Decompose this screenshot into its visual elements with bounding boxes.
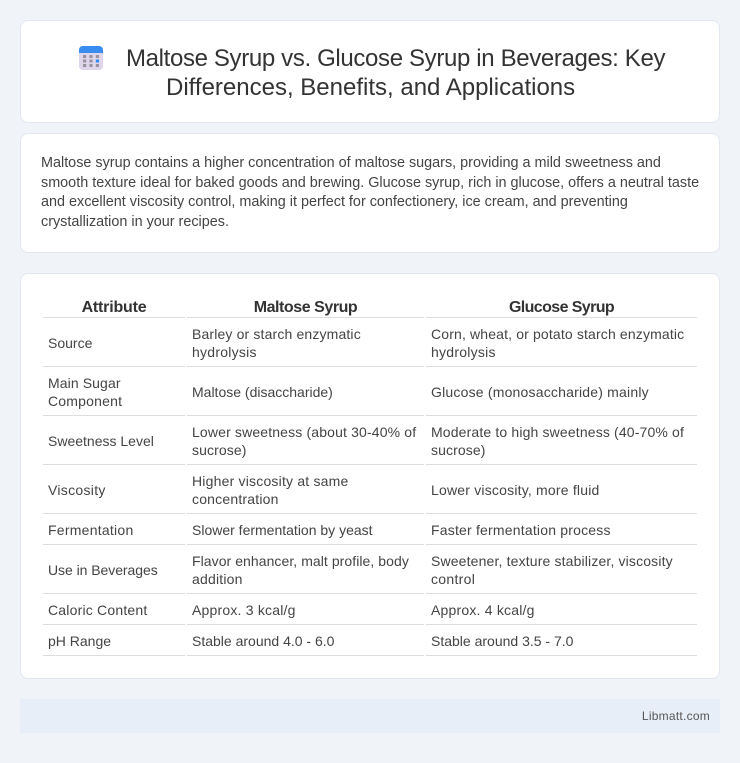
row: use in beverages: control [431, 571, 475, 587]
row: use in beverages [48, 553, 673, 587]
row: sweetness level: Moderate to high sweetness (40-70% of [431, 424, 684, 440]
row: main sugar component: Glucose (monosaccharide) mainly [431, 384, 649, 400]
row: caloric content: Caloric Content [48, 602, 148, 618]
row: caloric content [48, 602, 535, 618]
footer [20, 699, 720, 733]
column headers: Glucose Syrup [509, 298, 614, 316]
title: Maltose Syrup vs. Glucose Syrup in Beverages: Key [126, 45, 665, 72]
intro paragraph: Maltose syrup contains a higher concentration of maltose sugars, providing a mild sweetness and [41, 155, 661, 171]
row: pH range: Stable around 3.5 - 7.0 [431, 633, 573, 649]
row: fermentation [48, 522, 611, 538]
row: source: hydrolysis [431, 344, 496, 360]
row: pH range: Stable around 4.0 - 6.0 [192, 633, 334, 649]
row: fermentation: Faster fermentation process [431, 522, 611, 538]
row: main sugar component: Main Sugar [48, 375, 121, 391]
intro paragraph: and excellent viscosity control, making it perfect for confectionery, ice cream, and preventing [41, 194, 628, 210]
row: fermentation: Slower fermentation by yeast [192, 522, 373, 538]
row: main sugar component [48, 375, 649, 409]
row: source: hydrolysis [192, 344, 257, 360]
row: sweetness level: sucrose) [431, 442, 485, 458]
title: Differences, Benefits, and Applications [166, 74, 575, 101]
row: sweetness level: sucrose) [192, 442, 246, 458]
row: viscosity: Lower viscosity, more fluid [431, 482, 600, 498]
row: sweetness level: Sweetness Level [48, 433, 154, 449]
row: viscosity: concentration [192, 491, 279, 507]
row: viscosity [48, 473, 600, 507]
row: sweetness level [48, 424, 684, 458]
row: viscosity: Viscosity [48, 482, 106, 498]
panel: intro text [20, 133, 720, 253]
intro paragraph [41, 155, 699, 230]
row: use in beverages: addition [192, 571, 243, 587]
row: viscosity: Higher viscosity at same [192, 473, 349, 489]
row: caloric content: Approx. 3 kcal/g [192, 602, 296, 618]
row: main sugar component: Component [48, 393, 122, 409]
row: fermentation: Fermentation [48, 522, 133, 538]
header panel [20, 20, 720, 123]
row: use in beverages: Flavor enhancer, malt profile, body [192, 553, 409, 569]
row: pH range [48, 633, 573, 649]
column headers: Maltose Syrup [254, 298, 357, 316]
column headers: Attribute [82, 298, 146, 316]
row: pH range: pH Range [48, 633, 111, 649]
title [126, 45, 666, 101]
row: source: Corn, wheat, or potato starch enzymatic [431, 326, 684, 342]
row: source [48, 326, 684, 360]
row: use in beverages: Use in Beverages [48, 562, 158, 578]
row: caloric content: Approx. 4 kcal/g [431, 602, 535, 618]
intro paragraph: crystallization in your recipes. [41, 214, 229, 230]
column headers [82, 298, 614, 316]
row: source: Barley or starch enzymatic [192, 326, 361, 342]
icon: calendar [79, 46, 103, 70]
panel: comparison table [20, 273, 720, 679]
footer credit: Libmatt.com [642, 709, 710, 723]
row: main sugar component: Maltose (disaccharide) [192, 384, 333, 400]
row: use in beverages: Sweetener, texture stabilizer, viscosity [431, 553, 673, 569]
row: source: Source [48, 335, 92, 351]
intro paragraph: smooth texture ideal for baked goods and brewing. Glucose syrup, rich in glucose, offers a neutral taste [41, 175, 699, 191]
row: sweetness level: Lower sweetness (about 30-40% of [192, 424, 416, 440]
